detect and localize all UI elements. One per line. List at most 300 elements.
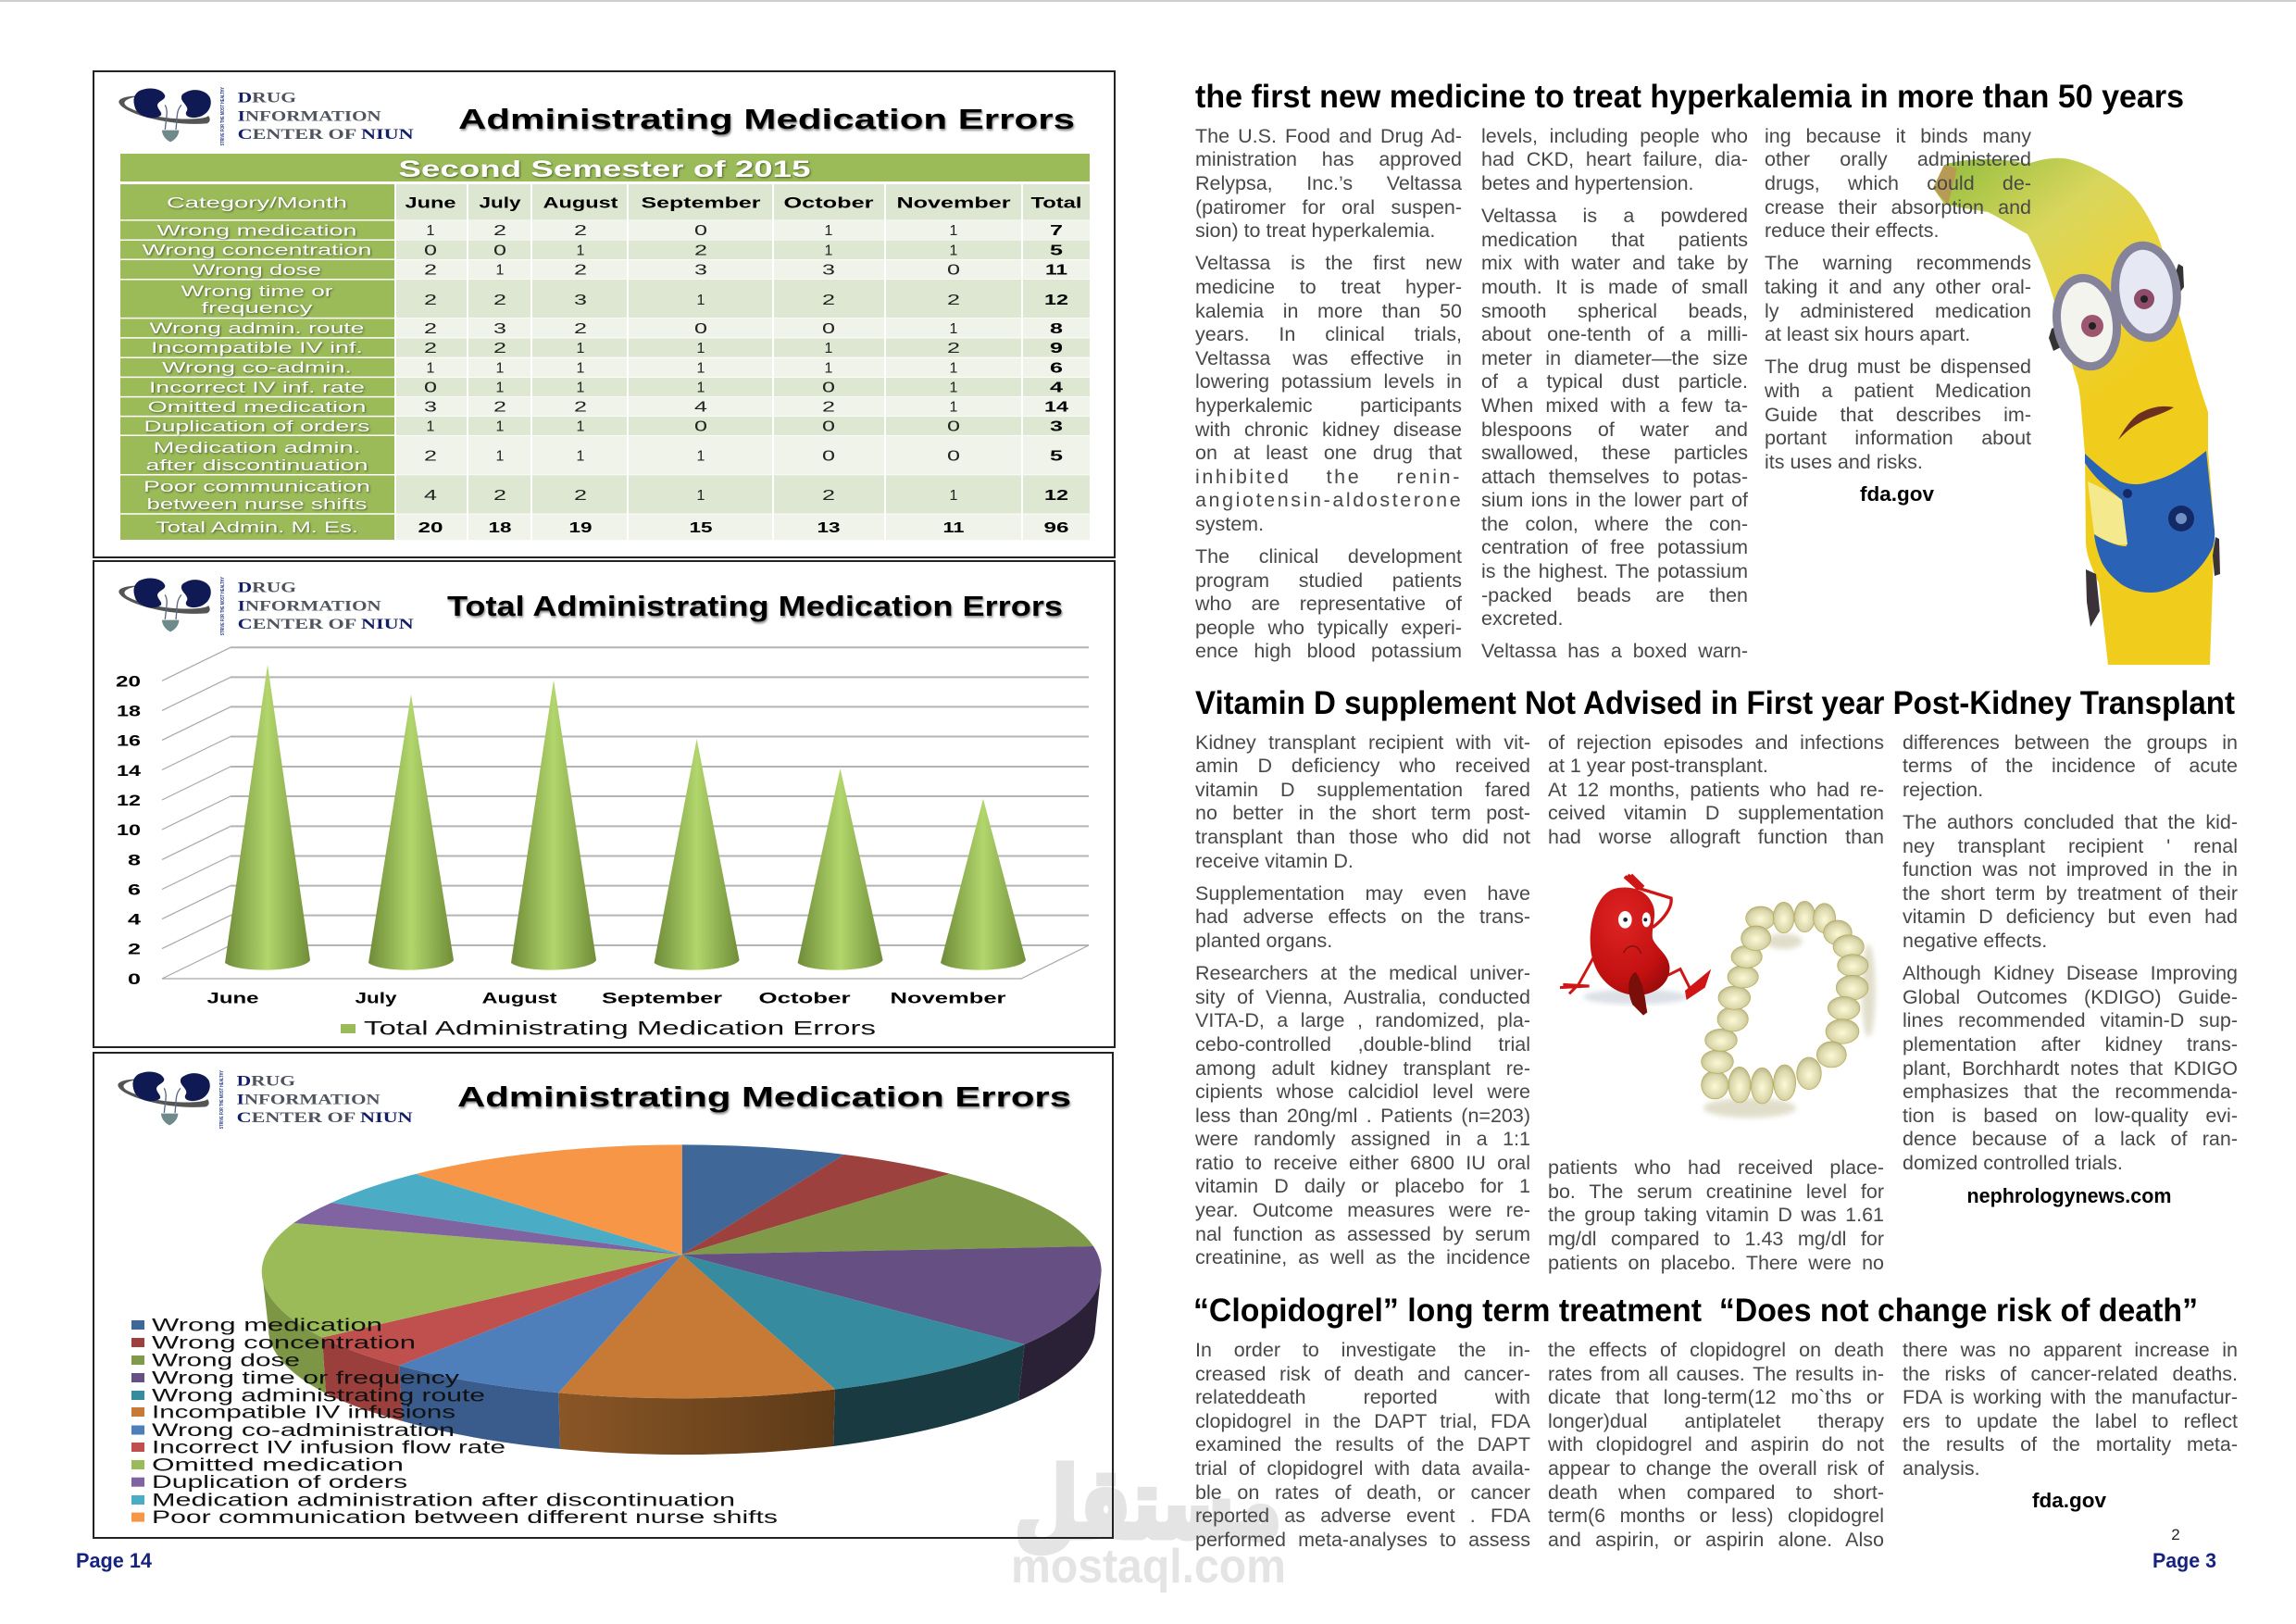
table values: 2 bbox=[574, 223, 587, 239]
article 2 column 3: Global Outcomes (KDIGO) Guide- bbox=[1903, 986, 2238, 1008]
table values: 1 bbox=[577, 380, 585, 396]
article 2 column 3: function was not improved in the in bbox=[1903, 858, 2238, 881]
table values: 1 bbox=[577, 418, 585, 435]
article 2 column 3: differences between the groups in bbox=[1903, 731, 2238, 754]
article 2 column 1: vitamin D supplementation fared bbox=[1195, 779, 1530, 801]
logo: DRUG bbox=[238, 91, 296, 106]
table values: 1 bbox=[496, 380, 505, 396]
table values: 4 bbox=[694, 400, 707, 415]
article 3 column 3: the risks of cancer-related deaths. bbox=[1903, 1363, 2238, 1385]
article 2 column 1: less than 20ng/ml . Patients (n=203) bbox=[1195, 1105, 1530, 1127]
article 1 column 1: on at least one drug that bbox=[1195, 442, 1462, 464]
article 2 column 3: plant, Borchhardt notes that KDIGO bbox=[1903, 1057, 2238, 1080]
table values: 2 bbox=[493, 488, 506, 504]
pie legend: Incorrect IV infusion flow rate bbox=[152, 1439, 505, 1457]
article 1 column 2: levels, including people who bbox=[1481, 125, 1748, 147]
table values: 0 bbox=[822, 418, 835, 435]
pie legend: Omitted medication bbox=[152, 1455, 404, 1476]
article 1 column 3: portant information about bbox=[1765, 427, 2031, 449]
article 2 column 1: planted organs. bbox=[1195, 930, 1332, 952]
table values: 2 bbox=[424, 341, 437, 356]
table values: 2 bbox=[424, 448, 437, 465]
table values: 3 bbox=[493, 321, 506, 337]
small page digit: 2 bbox=[2171, 1526, 2180, 1543]
article 1 column 2: of a typical dust particle. bbox=[1481, 370, 1748, 393]
article 2 column 1: Kidney transplant recipient with vit- bbox=[1195, 731, 1530, 754]
y axis labels: 16 bbox=[117, 731, 141, 750]
table values: 15 bbox=[689, 520, 713, 536]
column headers: August bbox=[543, 194, 618, 211]
month labels: June bbox=[207, 989, 259, 1007]
article 1 column 1: (patiromer for oral suspen- bbox=[1195, 196, 1462, 219]
article 1 column 1: medicine to treat hyper- bbox=[1195, 276, 1462, 298]
article 3 column 2: the effects of clopidogrel on death bbox=[1548, 1339, 1884, 1361]
table values: 1 bbox=[427, 418, 435, 435]
article 3 column 3 bbox=[1903, 1339, 2238, 1480]
pie legend: Wrong medication bbox=[152, 1317, 382, 1335]
month labels: August bbox=[481, 989, 557, 1007]
article 2 column 3: vitamin D deficiency but even had bbox=[1903, 906, 2238, 928]
table values: 9 bbox=[1050, 341, 1063, 356]
panel: 3D pie chart bbox=[94, 1053, 1113, 1538]
article 2 column 2 upper: of rejection episodes and infections bbox=[1548, 731, 1884, 754]
row labels bbox=[143, 194, 372, 536]
icon: sad kidney and vitamin D capsules bbox=[1560, 875, 1876, 1118]
y axis labels: 18 bbox=[117, 702, 141, 720]
logo bbox=[118, 1070, 413, 1129]
pie legend: Wrong time or frequency bbox=[152, 1368, 460, 1389]
watermark: mostaql bbox=[1011, 1447, 1286, 1593]
article 1 column 1: Veltassa was effective in bbox=[1195, 347, 1462, 369]
article 1 column 3: Guide that describes im- bbox=[1765, 404, 2031, 426]
row labels: after discontinuation bbox=[146, 456, 368, 474]
article 2 column 2 upper: ceived vitamin D supplementation bbox=[1548, 802, 1884, 824]
article 3 column 1: In order to investigate the in- bbox=[1195, 1339, 1530, 1361]
table values: 11 bbox=[942, 520, 965, 536]
article 1 column 2: medication that patients bbox=[1481, 229, 1748, 251]
table values: 1 bbox=[496, 263, 505, 278]
table values: 0 bbox=[424, 380, 437, 396]
article 2 column 2 lower: mg/dl compared to 1.43 mg/dl for bbox=[1548, 1228, 1884, 1250]
article 2 column 1 bbox=[1195, 731, 1530, 1268]
article 3 column 1: creased risk of death and cancer- bbox=[1195, 1363, 1530, 1385]
source: nephrologynews.com: nephrologynews.com bbox=[1966, 1184, 2172, 1207]
article 1 column 1: The clinical development bbox=[1195, 545, 1462, 568]
logo: DRUG bbox=[238, 581, 296, 596]
y axis labels: 8 bbox=[128, 852, 141, 868]
table values: 2 bbox=[424, 321, 437, 337]
article 1 column 1: lowering potassium levels in bbox=[1195, 370, 1462, 393]
article 1 column 1: years. In clinical trials, bbox=[1195, 323, 1462, 345]
month labels bbox=[207, 989, 1006, 1007]
pie legend bbox=[131, 1317, 778, 1528]
article 2 column 1: creatinine, as well as the incidence bbox=[1195, 1246, 1530, 1268]
table values: 1 bbox=[950, 380, 958, 396]
table values: 1 bbox=[950, 488, 958, 504]
table values: 13 bbox=[817, 520, 841, 536]
article 1 column 2: had CKD, heart failure, dia- bbox=[1481, 148, 1748, 170]
table values: 6 bbox=[1050, 361, 1063, 376]
pie legend: Medication administration after discontinuation bbox=[152, 1491, 735, 1511]
table values: 2 bbox=[574, 263, 587, 278]
row labels: Poor communication bbox=[144, 478, 370, 495]
table values: 12 bbox=[1044, 293, 1068, 308]
chart grid bbox=[162, 647, 1089, 979]
logo: CENTER OF NIUN bbox=[238, 127, 414, 143]
article 3 column 2: term(6 months or less) clopidogrel bbox=[1548, 1505, 1884, 1527]
icon: minion banana bbox=[1933, 158, 2220, 665]
article 2 column 1: year. Outcome measures were re- bbox=[1195, 1199, 1530, 1221]
logo bbox=[119, 87, 414, 145]
y axis labels: 4 bbox=[128, 911, 142, 928]
table values: 1 bbox=[950, 321, 958, 337]
table values: 1 bbox=[496, 448, 505, 465]
article 2 column 2 upper: had worse allograft function than bbox=[1548, 826, 1884, 848]
table values: 96 bbox=[1044, 520, 1069, 536]
y axis labels bbox=[116, 672, 142, 988]
table values: 1 bbox=[950, 361, 958, 376]
y axis labels: 6 bbox=[128, 881, 141, 898]
table values: 2 bbox=[947, 293, 960, 308]
column headers: July bbox=[480, 194, 521, 211]
table values: 1 bbox=[697, 448, 705, 465]
article 3 column 2: dicate that long-term(12 mo`ths or bbox=[1548, 1386, 1884, 1408]
article 1 column 2: is the highest. The potassium bbox=[1481, 560, 1748, 582]
icon: kidney character bbox=[1560, 875, 1711, 1016]
table values: 1 bbox=[697, 361, 705, 376]
table values: 1 bbox=[697, 488, 705, 504]
pie legend: Wrong co-administration bbox=[152, 1421, 455, 1441]
table values: 2 bbox=[947, 341, 960, 356]
article 1 column 1 bbox=[1195, 125, 1463, 662]
article 2 column 3: tion is based on low-quality evi- bbox=[1903, 1105, 2238, 1127]
article 1 column 1: ministration has approved bbox=[1195, 148, 1462, 170]
article 1 column 1: Veltassa is the first new bbox=[1195, 252, 1462, 274]
article 1 column 2: mix with water and take by bbox=[1481, 252, 1748, 274]
article 1 column 2: excreted. bbox=[1481, 607, 1563, 630]
table values: 7 bbox=[1050, 223, 1063, 239]
heading: clopidogrel: “Clopidogrel” long term treatment “Does not change risk of death” bbox=[1193, 1293, 2198, 1329]
article 1 column 2: When mixed with a few ta- bbox=[1481, 394, 1748, 417]
table values: 2 bbox=[694, 243, 707, 259]
panel: medication errors table bbox=[94, 71, 1115, 557]
source: fda.gov: fda.gov bbox=[2032, 1489, 2107, 1512]
table values: 1 bbox=[577, 448, 585, 465]
article 2 column 2 lower: patients on placebo. There were no bbox=[1548, 1252, 1884, 1274]
logo: DRUG bbox=[237, 1074, 295, 1090]
table values: 4 bbox=[1050, 380, 1063, 396]
pie legend: Wrong dose bbox=[152, 1352, 300, 1370]
pie legend: Wrong concentration bbox=[152, 1333, 416, 1354]
article 1 column 3 bbox=[1765, 125, 2031, 473]
table values: 2 bbox=[493, 341, 506, 356]
article 2 column 1: sity of Vienna, Australia, conducted bbox=[1195, 986, 1530, 1008]
table values: 2 bbox=[424, 293, 437, 308]
article 1 column 2 bbox=[1481, 125, 1748, 662]
article 1 column 3: reduce their effects. bbox=[1765, 219, 1939, 242]
column headers: November bbox=[896, 194, 1011, 211]
table values: 1 bbox=[496, 361, 505, 376]
article 1 column 1: who are representative of bbox=[1195, 593, 1462, 615]
row labels: frequency bbox=[202, 299, 313, 317]
article 3 column 1: ble on rates of death, or cancer bbox=[1195, 1481, 1530, 1504]
article 1 column 2: Veltassa is a powdered bbox=[1481, 205, 1748, 227]
article 2 column 1: ratio to receive either 6800 IU oral bbox=[1195, 1152, 1530, 1174]
logo bbox=[119, 577, 414, 635]
article 2 column 1: VITA-D, a large , randomized, pla- bbox=[1195, 1009, 1530, 1031]
pie top slices bbox=[262, 1144, 1102, 1398]
y axis labels: 0 bbox=[128, 970, 141, 988]
table values: 3 bbox=[574, 293, 587, 308]
row labels: Wrong concentration bbox=[143, 241, 372, 259]
article 1 column 1: system. bbox=[1195, 513, 1264, 535]
article 2 column 3: plementation after kidney trans- bbox=[1903, 1033, 2238, 1056]
logo: CENTER OF NIUN bbox=[237, 1110, 413, 1126]
table values: 0 bbox=[822, 380, 835, 396]
panel: cone chart bbox=[94, 561, 1115, 1047]
table values: 1 bbox=[950, 243, 958, 259]
article 2 column 1: were randomly assigned in a 1:1 bbox=[1195, 1128, 1530, 1150]
article 2 column 1: no better in the short term post- bbox=[1195, 802, 1530, 824]
panel title: Administrating Medication Errors bbox=[458, 103, 1075, 135]
article 1 column 2: smooth spherical beads, bbox=[1481, 300, 1748, 322]
table values: 1 bbox=[697, 293, 705, 308]
source: fda.gov: fda.gov bbox=[1860, 482, 1935, 506]
month labels: October bbox=[759, 989, 851, 1007]
article 1 column 1: hyperkalemic participants bbox=[1195, 394, 1462, 417]
table values: 0 bbox=[694, 418, 707, 435]
article 1 column 2: about one-tenth of a milli- bbox=[1481, 323, 1748, 345]
table values: 14 bbox=[1044, 400, 1068, 415]
article 3 column 2: rates from all causes. The results in- bbox=[1548, 1363, 1884, 1385]
heading: vitamin D: Vitamin D supplement Not Advised in First year Post-Kidney Transplant bbox=[1195, 685, 2235, 721]
table values: 3 bbox=[424, 400, 437, 415]
row labels: between nurse shifts bbox=[146, 495, 367, 513]
article 2 column 1: nal function as assessed by serum bbox=[1195, 1223, 1530, 1245]
article 2 column 2 lower: bo. The serum creatinine level for bbox=[1548, 1181, 1884, 1203]
table values: 0 bbox=[947, 448, 960, 465]
cones bbox=[225, 665, 1026, 970]
chart legend bbox=[341, 1018, 876, 1039]
row labels: Medication admin. bbox=[154, 439, 361, 456]
table values: 2 bbox=[493, 400, 506, 415]
top edge rule bbox=[0, 0, 2296, 2]
chart title: Total Administrating Medication Errors bbox=[447, 590, 1063, 622]
pie legend: Incompatible IV infusions bbox=[152, 1404, 455, 1422]
article 1 column 1: ence high blood potassium bbox=[1195, 640, 1462, 662]
table values: 2 bbox=[822, 293, 835, 308]
y axis labels: 14 bbox=[117, 762, 142, 780]
article 1 column 1: with chronic kidney disease bbox=[1195, 418, 1462, 441]
logo: INFORMATION bbox=[237, 1093, 381, 1108]
article 2 column 3: terms of the incidence of acute bbox=[1903, 755, 2238, 777]
article 1 column 1: sion) to treat hyperkalemia. bbox=[1195, 219, 1435, 242]
article 1 column 3: at least six hours apart. bbox=[1765, 323, 1970, 345]
month labels: September bbox=[602, 989, 723, 1007]
pie legend: Poor communication between different nurse shifts bbox=[152, 1508, 778, 1528]
article 1 column 2: swallowed, these particles bbox=[1481, 442, 1748, 464]
table values: 4 bbox=[424, 488, 437, 504]
table values: 19 bbox=[568, 520, 593, 536]
table values: 3 bbox=[1050, 418, 1063, 435]
article 2 column 3: domized controlled trials. bbox=[1903, 1152, 2123, 1174]
pie title: Administrating Medication Errors bbox=[457, 1081, 1071, 1113]
table values: 11 bbox=[1045, 263, 1067, 278]
article 2 column 1: Researchers at the medical univer- bbox=[1195, 962, 1530, 984]
article 2 column 3: lines recommended vitamin-D sup- bbox=[1903, 1009, 2238, 1031]
article 2 column 1: transplant than those who did not bbox=[1195, 826, 1530, 848]
y axis labels: 12 bbox=[117, 792, 141, 809]
article 3 column 3: there was no apparent increase in bbox=[1903, 1339, 2238, 1361]
table values: 1 bbox=[825, 243, 833, 259]
article 2 column 3: rejection. bbox=[1903, 779, 1983, 801]
article 1 column 2: betes and hypertension. bbox=[1481, 172, 1694, 194]
table values: 1 bbox=[950, 223, 958, 239]
table values: 0 bbox=[947, 418, 960, 435]
article 1 column 1: Relypsa, Inc.’s Veltassa bbox=[1195, 172, 1462, 194]
article 1 column 3: The drug must be dispensed bbox=[1765, 356, 2031, 378]
pie side wall bbox=[262, 1272, 1102, 1455]
pie legend: Duplication of orders bbox=[152, 1473, 407, 1493]
table values: 1 bbox=[427, 361, 435, 376]
column headers: September bbox=[641, 194, 761, 211]
table values: 8 bbox=[1050, 321, 1063, 337]
article 1 column 1: angiotensin-aldosterone bbox=[1195, 489, 1463, 511]
article 2 column 1: vitamin D daily or placebo for 1 bbox=[1195, 1175, 1530, 1197]
table values: 0 bbox=[947, 263, 960, 278]
row labels: Wrong admin. route bbox=[150, 319, 365, 337]
article 1 column 3: crease their absorption and bbox=[1765, 196, 2031, 219]
article 3 column 3: FDA is working with the manufactur- bbox=[1903, 1386, 2238, 1408]
table grid bbox=[120, 184, 1090, 540]
y axis labels: 2 bbox=[128, 941, 141, 957]
column headers: Total bbox=[1031, 194, 1081, 211]
article 3 column 2: death when compared to short- bbox=[1548, 1481, 1884, 1504]
logo: INFORMATION bbox=[238, 109, 381, 125]
table values: 1 bbox=[697, 380, 705, 396]
table values: 0 bbox=[694, 223, 707, 239]
article 2 column 3: negative effects. bbox=[1903, 930, 2047, 952]
article 2 column 2 lower: the group taking vitamin D was 1.61 bbox=[1548, 1204, 1884, 1226]
table values: 1 bbox=[950, 400, 958, 415]
table values bbox=[418, 223, 1069, 536]
article 2 column 1: had adverse effects on the trans- bbox=[1195, 906, 1530, 928]
row labels: Omitted medication bbox=[148, 398, 367, 416]
article 2 column 2 upper: at 1 year post-transplant. bbox=[1548, 755, 1768, 777]
article 1 column 1: people who typically experi- bbox=[1195, 617, 1462, 639]
article 1 column 1: program studied patients bbox=[1195, 569, 1462, 592]
table values: 2 bbox=[574, 321, 587, 337]
table values: 3 bbox=[694, 263, 707, 278]
pie legend: Wrong administrating route bbox=[152, 1387, 485, 1405]
article 2 column 3: Although Kidney Disease Improving bbox=[1903, 962, 2238, 984]
article 1 column 2: sium ions in the lower part of bbox=[1481, 489, 1748, 511]
article 1 column 2: -packed beads are then bbox=[1481, 584, 1748, 606]
article 3 column 1: trial of clopidogrel with data availa- bbox=[1195, 1457, 1530, 1480]
article 2 column 3: ney transplant recipient ' renal bbox=[1903, 835, 2238, 857]
article 2 column 3: emphasizes that the recommenda- bbox=[1903, 1081, 2238, 1103]
table values: 1 bbox=[577, 341, 585, 356]
article 1 column 3: its uses and risks. bbox=[1765, 451, 1923, 473]
article 2 column 2 upper bbox=[1548, 731, 1884, 848]
article 1 column 2: attach themselves to potas- bbox=[1481, 466, 1748, 488]
table values: 12 bbox=[1044, 488, 1068, 504]
article 3 column 2: and aspirin, or aspirin alone. Also bbox=[1548, 1529, 1884, 1551]
table values: 0 bbox=[822, 448, 835, 465]
table banner: Second Semester of 2015 bbox=[398, 156, 811, 182]
article 1 column 2: mouth. It is made of small bbox=[1481, 276, 1748, 298]
table values: 1 bbox=[496, 418, 505, 435]
table values: 0 bbox=[493, 243, 506, 259]
logo: STRIVE FOR THE MOST HEALTHY bbox=[220, 577, 226, 635]
article 1 column 3: ing because it binds many bbox=[1765, 125, 2031, 147]
table values: 1 bbox=[427, 223, 435, 239]
article 2 column 1: Supplementation may even have bbox=[1195, 882, 1530, 905]
watermark: mostaql: mostaql.com bbox=[1011, 1540, 1286, 1593]
table values: 2 bbox=[424, 263, 437, 278]
chart legend: Total Administrating Medication Errors bbox=[364, 1018, 876, 1039]
table values: 5 bbox=[1050, 243, 1063, 259]
table values: 18 bbox=[489, 520, 512, 536]
article 2 column 1: among adult kidney transplant re- bbox=[1195, 1057, 1530, 1080]
table values: 0 bbox=[694, 321, 707, 337]
article 1 column 3: The warning recommends bbox=[1765, 252, 2031, 274]
article 1 column 3: with a patient Medication bbox=[1765, 380, 2031, 402]
row labels: Wrong medication bbox=[157, 222, 357, 239]
article 3 column 1: clopidogrel in the DAPT trial, FDA bbox=[1195, 1410, 1530, 1432]
row labels: Incorrect IV inf. rate bbox=[149, 379, 365, 396]
heading: hyperkalemia: the first new medicine to treat hyperkalemia in more than 50 years bbox=[1195, 79, 2184, 115]
article 1 column 2: the colon, where the con- bbox=[1481, 513, 1748, 535]
column headers bbox=[406, 194, 1081, 211]
article 3 column 2: with clopidogrel and aspirin do not bbox=[1548, 1433, 1884, 1455]
table values: 1 bbox=[697, 341, 705, 356]
table values: 2 bbox=[822, 400, 835, 415]
article 2 column 3: the short term by treatment of their bbox=[1903, 882, 2238, 905]
article 2 column 2 upper: At 12 months, patients who had re- bbox=[1548, 779, 1884, 801]
column headers: October bbox=[783, 194, 874, 211]
article 2 column 2 lower bbox=[1548, 1156, 1884, 1274]
article 3 column 3: the results of the mortality meta- bbox=[1903, 1433, 2238, 1455]
article 3 column 2: longer)dual antiplatelet therapy bbox=[1548, 1410, 1884, 1432]
article 3 column 1: reported as adverse event . FDA bbox=[1195, 1505, 1530, 1527]
article 3 column 2: appear to change the overall risk of bbox=[1548, 1457, 1884, 1480]
watermark: mostaql: مستقل bbox=[1015, 1447, 1281, 1560]
row labels: Wrong time or bbox=[181, 282, 333, 300]
y axis labels: 20 bbox=[116, 672, 141, 691]
table values: 20 bbox=[418, 520, 443, 536]
table values: 2 bbox=[493, 293, 506, 308]
article 1 column 3: other orally administered bbox=[1765, 148, 2031, 170]
icon: capsule letter D bbox=[1702, 901, 1876, 1118]
table values: 2 bbox=[822, 488, 835, 504]
table values: 1 bbox=[825, 341, 833, 356]
article 1 column 3: taking it and any other oral- bbox=[1765, 276, 2031, 298]
table banner bbox=[120, 154, 1090, 182]
article 3 column 1: examined the results of the DAPT bbox=[1195, 1433, 1530, 1455]
article 3 column 3: analysis. bbox=[1903, 1457, 1980, 1480]
column headers: June bbox=[406, 194, 455, 211]
article 2 column 1: cipients whose calcidiol level were bbox=[1195, 1081, 1530, 1103]
article 1 column 2: centration of free potassium bbox=[1481, 536, 1748, 558]
article 2 column 3: dence because of a lack of ran- bbox=[1903, 1128, 2238, 1150]
row labels: Duplication of orders bbox=[144, 418, 370, 435]
table values: 3 bbox=[822, 263, 835, 278]
row labels: Total Admin. M. Es. bbox=[156, 518, 358, 536]
table values: 2 bbox=[574, 488, 587, 504]
logo: CENTER OF NIUN bbox=[238, 617, 414, 632]
row labels: Wrong dose bbox=[193, 261, 321, 279]
